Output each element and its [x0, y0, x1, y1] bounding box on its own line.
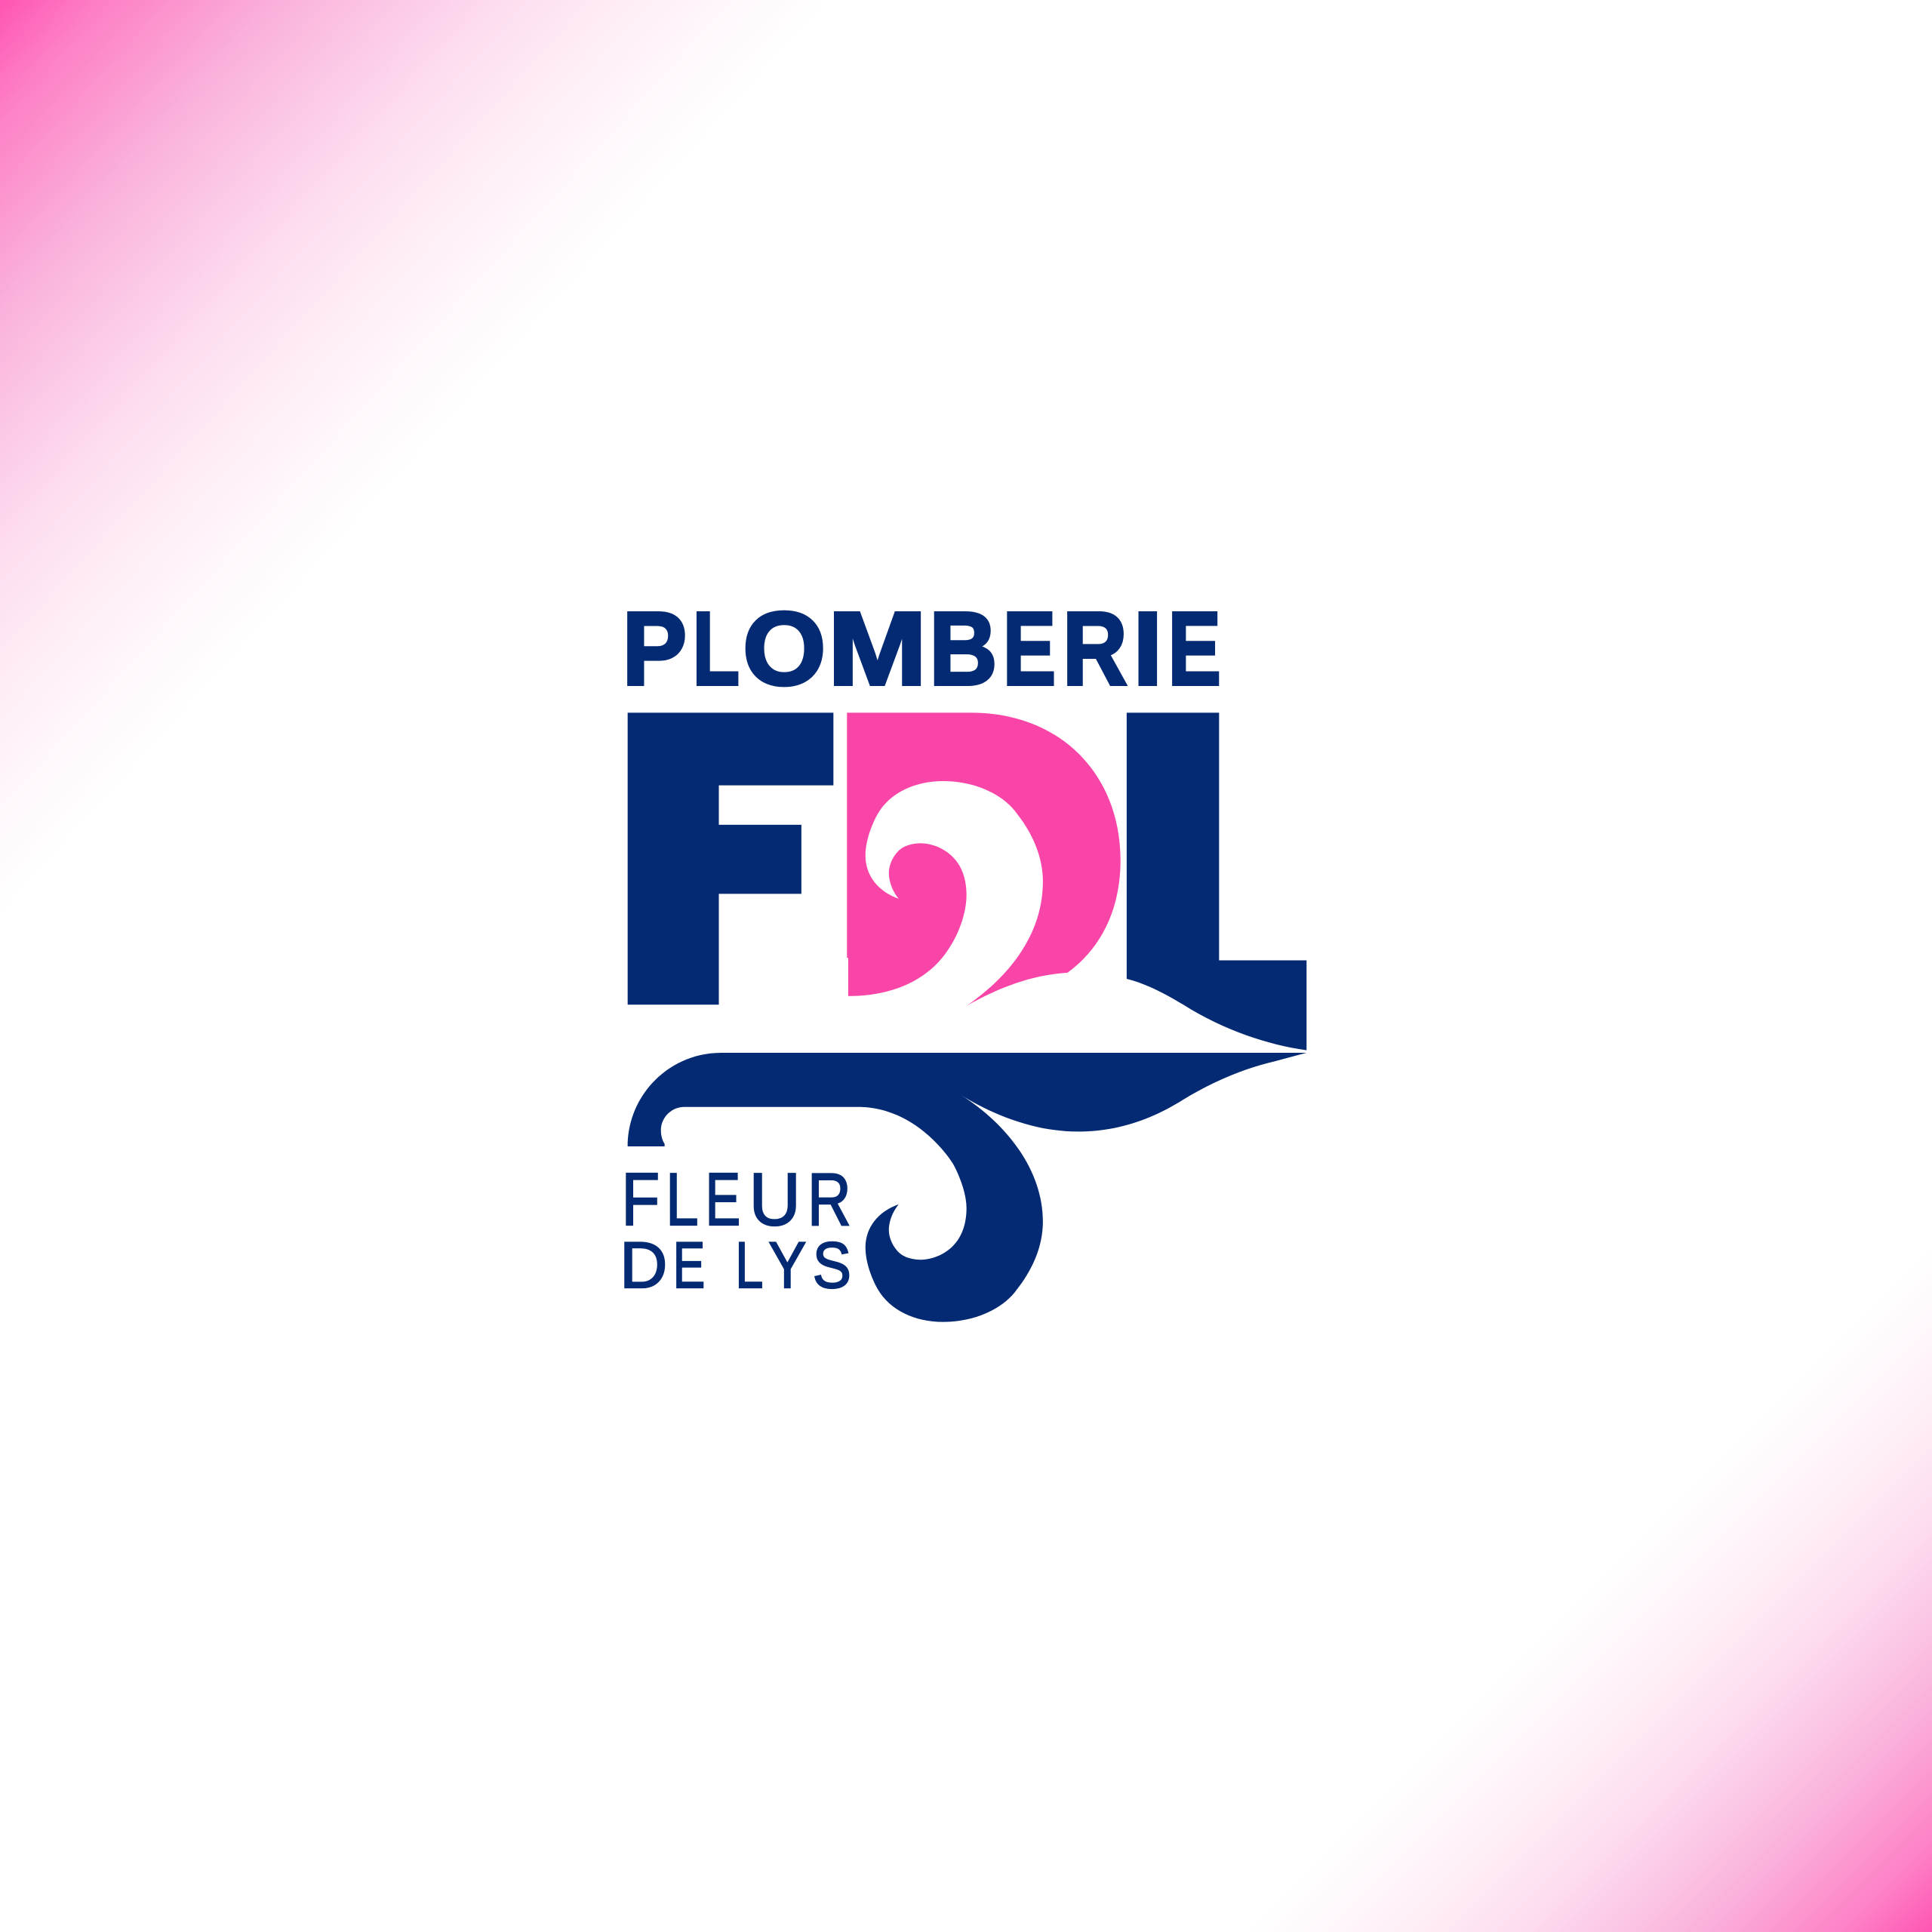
text: FLEUR: U: [749, 1158, 801, 1241]
heading: PLOMBERIE: L: [693, 591, 740, 707]
text: DE LYS: E: [673, 1229, 705, 1302]
heading: PLOMBERIE: E: [1168, 591, 1221, 707]
background gradient: top-left corner: [0, 0, 937, 1060]
heading: PLOMBERIE: E: [1003, 591, 1056, 707]
text: FLEUR: R: [808, 1158, 851, 1241]
monogram letter D with wave curl: [847, 712, 1121, 1006]
text: DE LYS: L: [735, 1229, 763, 1302]
wave pipe swoosh: [628, 1053, 1306, 1322]
text: FLEUR: L: [666, 1158, 699, 1241]
text: DE LYS: D: [620, 1229, 667, 1302]
text: DE LYS: Y: [768, 1229, 806, 1302]
text: FLEUR: E: [706, 1158, 740, 1241]
background gradient: bottom-right corner: [1208, 1208, 1932, 1932]
text: FLEUR: F: [622, 1158, 660, 1241]
heading: PLOMBERIE: R: [1063, 591, 1128, 707]
heading: PLOMBERIE: I: [1133, 591, 1162, 707]
text: DE LYS: S: [813, 1229, 851, 1302]
heading: PLOMBERIE: O: [743, 591, 826, 707]
heading: PLOMBERIE: B: [929, 591, 998, 707]
monogram letter L: [1127, 712, 1306, 1051]
monogram letter F: [628, 712, 833, 1004]
heading: PLOMBERIE: P: [622, 591, 687, 707]
heading: PLOMBERIE: M: [828, 591, 927, 707]
